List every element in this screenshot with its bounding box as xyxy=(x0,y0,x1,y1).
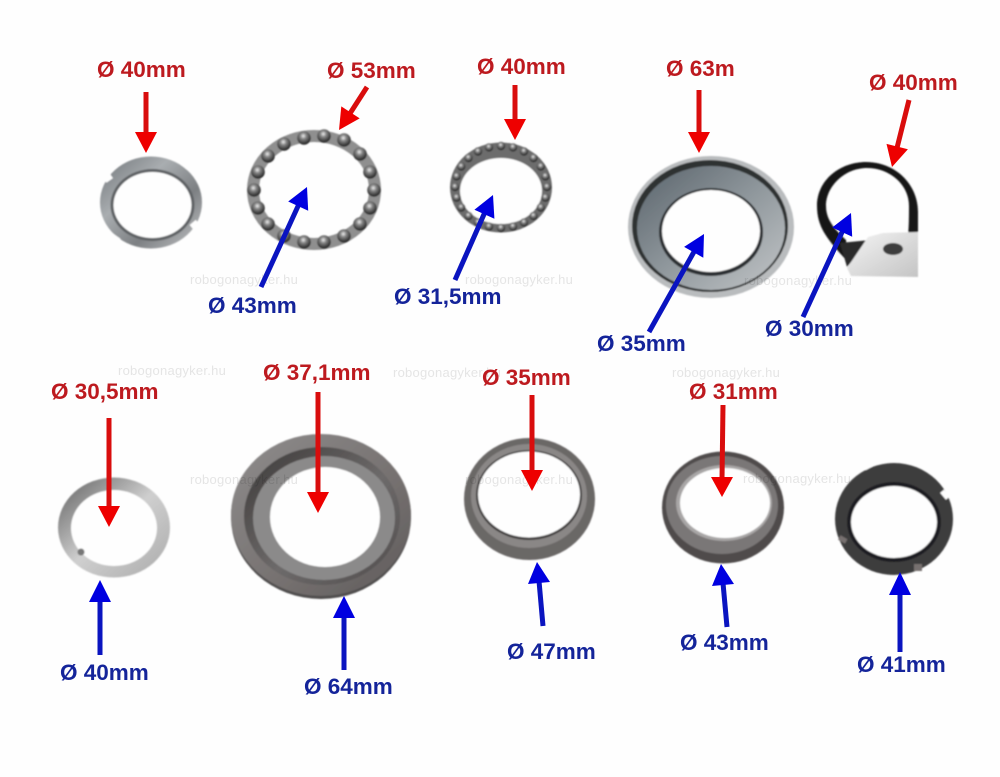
blue arrow: large cup xyxy=(333,596,355,670)
red arrow: small bearing xyxy=(504,85,526,140)
blue arrow: large bearing xyxy=(261,187,308,287)
watermarks: robogonagyker.hu xyxy=(190,472,298,487)
label: 40mm outer, small bearing: Ø 40mm xyxy=(477,54,566,79)
all parts group xyxy=(58,129,953,599)
blue arrow: clip xyxy=(803,213,852,317)
label: 63m outer, dust cap: Ø 63m xyxy=(666,56,735,81)
part: large ball bearing xyxy=(247,129,381,249)
part: silver lock nut xyxy=(100,156,202,248)
label: 40mm outer, lock nut: Ø 40mm xyxy=(97,57,186,82)
watermarks xyxy=(118,272,852,487)
red arrow: dust cap xyxy=(688,90,710,153)
watermarks: robogonagyker.hu xyxy=(672,365,780,380)
label: 41mm outer, dark lock nut: Ø 41mm xyxy=(857,652,946,677)
label: 35mm inner, dust cap: Ø 35mm xyxy=(597,331,686,356)
red arrow: large bearing xyxy=(339,87,367,130)
label: 30,5mm inner, thin ring: Ø 30,5mm xyxy=(51,379,159,404)
watermarks: robogonagyker.hu xyxy=(393,365,501,380)
arrows and labels xyxy=(51,54,958,699)
blue arrow: dark lock nut xyxy=(889,572,911,652)
blue arrow: dust cap xyxy=(649,234,704,332)
part: dust cap xyxy=(628,156,794,298)
label: 37,1mm inner, large cup: Ø 37,1mm xyxy=(263,360,371,385)
blue arrow: medium cup xyxy=(528,562,550,626)
label: 40mm outer, thin ring: Ø 40mm xyxy=(60,660,149,685)
label: 30mm inner, clip: Ø 30mm xyxy=(765,316,854,341)
blue arrow: thin ring xyxy=(89,580,111,655)
part: dark lock nut xyxy=(835,461,953,575)
label: 53mm outer, large bearing: Ø 53mm xyxy=(327,58,416,83)
blue arrow: stepped cup xyxy=(712,564,734,627)
label: 35mm inner, medium cup: Ø 35mm xyxy=(482,365,571,390)
blue arrow: small bearing xyxy=(455,195,494,280)
label: 31mm inner, stepped cup: Ø 31mm xyxy=(689,379,778,404)
red arrow: medium cup xyxy=(521,395,543,491)
watermarks: robogonagyker.hu xyxy=(744,273,852,288)
red arrow: clip xyxy=(886,100,909,167)
watermarks: robogonagyker.hu xyxy=(190,272,298,287)
part: black clip with bracket xyxy=(817,162,918,277)
part: stepped bearing cup xyxy=(662,452,784,564)
red arrow: thin ring xyxy=(98,418,120,527)
watermarks: robogonagyker.hu xyxy=(118,363,226,378)
label: 31,5mm inner, small bearing: Ø 31,5mm xyxy=(394,284,502,309)
label: 47mm outer, medium cup: Ø 47mm xyxy=(507,639,596,664)
red arrow: large cup xyxy=(307,392,329,513)
part: small ball bearing xyxy=(450,142,552,232)
label: 40mm outer, clip: Ø 40mm xyxy=(869,70,958,95)
watermarks: robogonagyker.hu xyxy=(743,471,851,486)
watermarks: robogonagyker.hu xyxy=(465,472,573,487)
red arrow: lock nut xyxy=(135,92,157,153)
red arrow: stepped cup xyxy=(711,405,733,497)
label: 43mm outer, stepped cup: Ø 43mm xyxy=(680,630,769,655)
label: 64mm outer, large cup: Ø 64mm xyxy=(304,674,393,699)
part: thin flat ring xyxy=(58,478,170,578)
part: large bearing cup xyxy=(231,434,411,599)
watermarks: robogonagyker.hu xyxy=(465,272,573,287)
label: 43mm inner, large bearing: Ø 43mm xyxy=(208,293,297,318)
part: medium bearing cup xyxy=(464,438,595,560)
